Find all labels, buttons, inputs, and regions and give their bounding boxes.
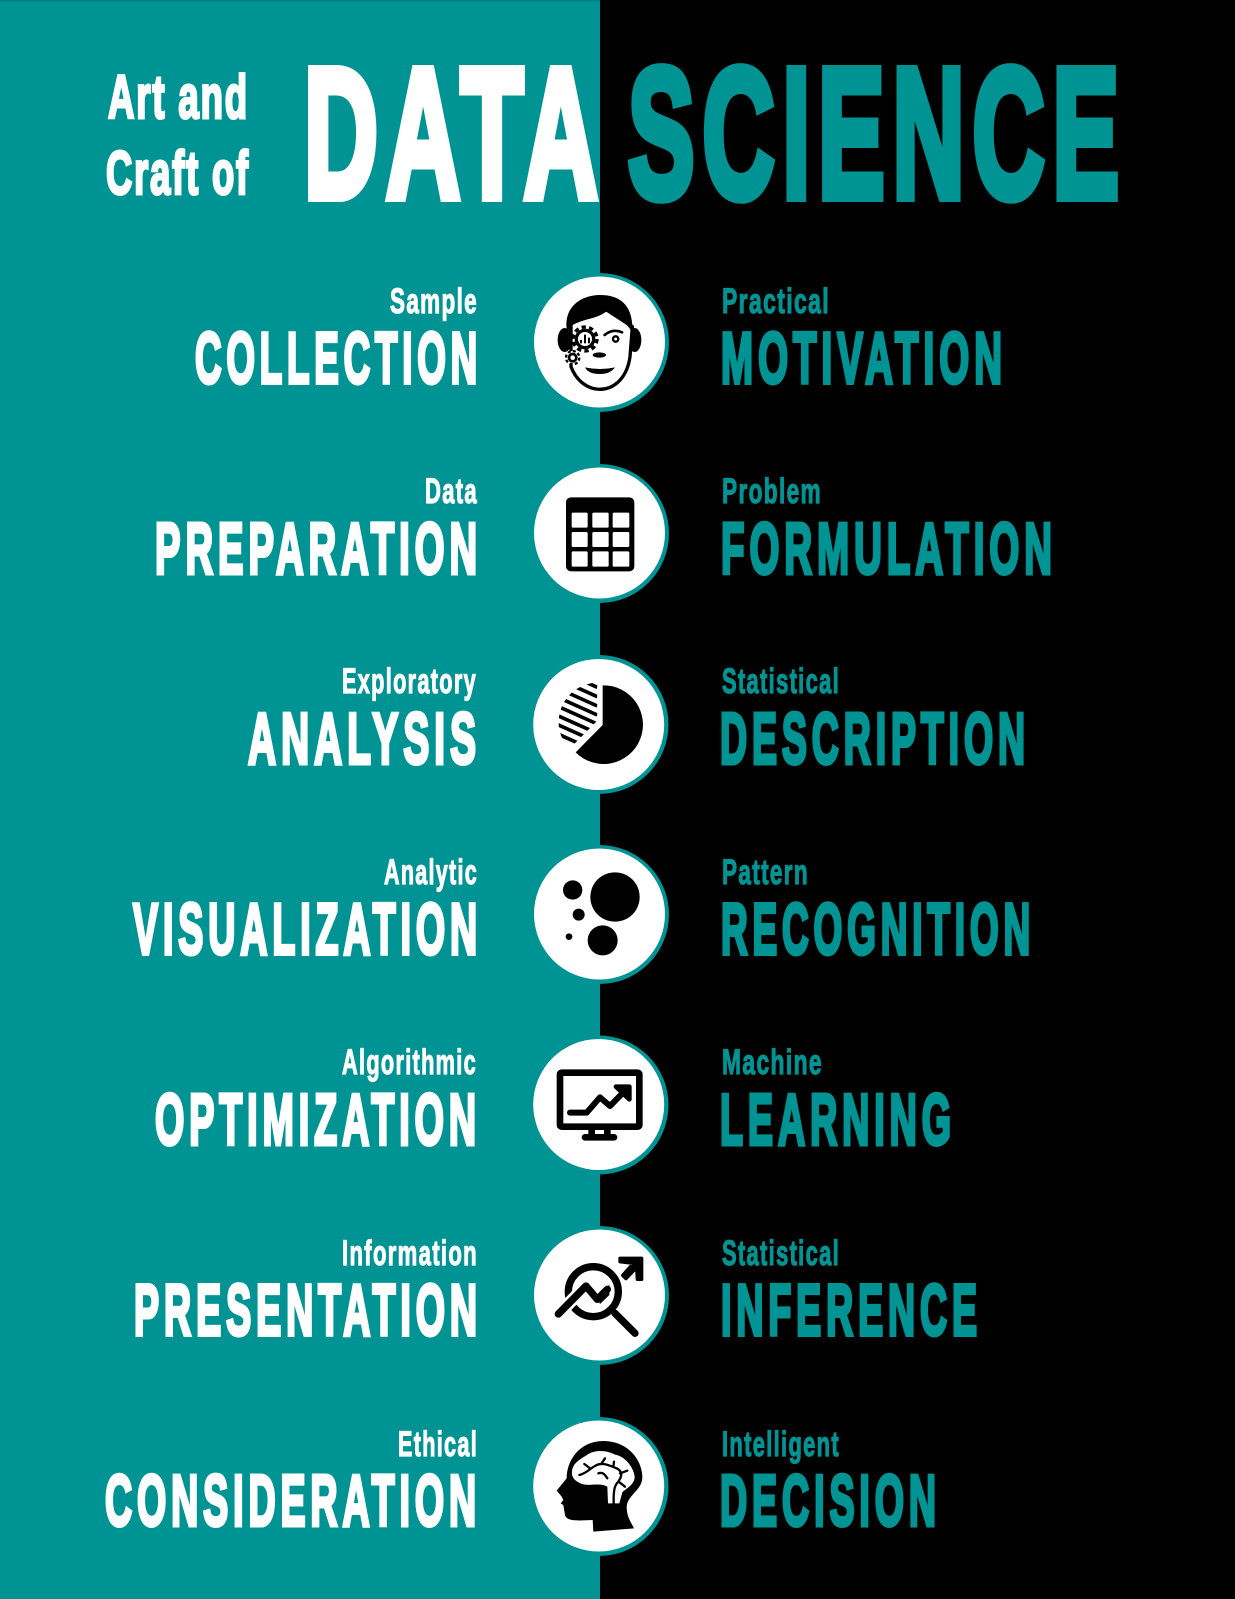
title bbox=[106, 31, 1127, 237]
label: Machine Learning: Machine bbox=[722, 1043, 823, 1082]
label: Sample Collection: Sample bbox=[390, 282, 478, 321]
panel: teal left background bbox=[0, 0, 600, 1599]
icon circle: bubbles bbox=[530, 845, 669, 984]
label: Intelligent Decision: DECISION bbox=[720, 1460, 941, 1542]
label: Problem Formulation: Problem bbox=[722, 472, 822, 511]
label: Data Preparation: Data bbox=[425, 472, 478, 511]
icon circle: monitor with rising chart bbox=[530, 1036, 668, 1174]
title: art and craft of bbox=[106, 63, 250, 207]
title: DATA: DATA bbox=[304, 31, 606, 237]
label: Sample Collection bbox=[195, 282, 482, 399]
label: Algorithmic Optimization bbox=[155, 1043, 481, 1160]
icon circle: magnifier with trend bbox=[530, 1226, 669, 1365]
label: Algorithmic Optimization: Algorithmic bbox=[342, 1043, 477, 1082]
label: Data Preparation bbox=[155, 472, 482, 590]
left column labels bbox=[105, 282, 482, 1542]
label: Exploratory Analysis: Exploratory bbox=[342, 662, 477, 701]
label: Machine Learning bbox=[720, 1043, 956, 1160]
panel: black right background bbox=[600, 0, 1235, 1599]
label: Information Presentation bbox=[134, 1234, 482, 1351]
right column labels bbox=[720, 282, 1057, 1542]
label: Analytic Visualization bbox=[133, 853, 482, 970]
title: art and craft of: Craft of bbox=[106, 139, 250, 207]
icon circle: head with brain bbox=[530, 1417, 668, 1556]
title: art and craft of: Art and bbox=[108, 63, 249, 131]
label: Practical Motivation: Practical bbox=[722, 282, 830, 321]
label: Problem Formulation bbox=[721, 472, 1057, 590]
label: Pattern Recognition: Pattern bbox=[722, 853, 809, 892]
label: Ethical Consideration: Ethical bbox=[398, 1425, 478, 1464]
top edge line bbox=[0, 0, 600, 2]
label: Analytic Visualization: Analytic bbox=[384, 853, 478, 892]
label: Algorithmic Optimization: OPTIMIZATION bbox=[155, 1080, 481, 1160]
label: Statistical Inference: INFERENCE bbox=[721, 1270, 982, 1351]
label: Statistical Inference bbox=[721, 1234, 982, 1351]
label: Information Presentation: PRESENTATION bbox=[134, 1270, 482, 1351]
label: Statistical Inference: Statistical bbox=[722, 1234, 840, 1273]
icon circle: data table bbox=[530, 464, 669, 603]
icon circle: face with gears bbox=[530, 273, 669, 412]
label: Ethical Consideration: CONSIDERATION bbox=[105, 1460, 481, 1542]
label: Sample Collection: COLLECTION bbox=[195, 318, 482, 399]
label: Statistical Description: Statistical bbox=[722, 662, 840, 701]
label: Pattern Recognition bbox=[721, 853, 1035, 970]
label: Data Preparation: PREPARATION bbox=[155, 508, 482, 590]
label: Statistical Description bbox=[720, 662, 1030, 780]
label: Exploratory Analysis: ANALYSIS bbox=[248, 698, 481, 780]
label: Machine Learning: LEARNING bbox=[720, 1080, 956, 1160]
label: Information Presentation: Information bbox=[342, 1234, 478, 1273]
label: Intelligent Decision: Intelligent bbox=[722, 1425, 840, 1464]
label: Intelligent Decision bbox=[720, 1425, 941, 1542]
label: Practical Motivation bbox=[721, 282, 1007, 399]
label: Analytic Visualization: VISUALIZATION bbox=[133, 889, 482, 970]
label: Ethical Consideration bbox=[105, 1425, 481, 1542]
label: Exploratory Analysis bbox=[248, 662, 481, 780]
icon circle: pie chart bbox=[530, 655, 668, 794]
